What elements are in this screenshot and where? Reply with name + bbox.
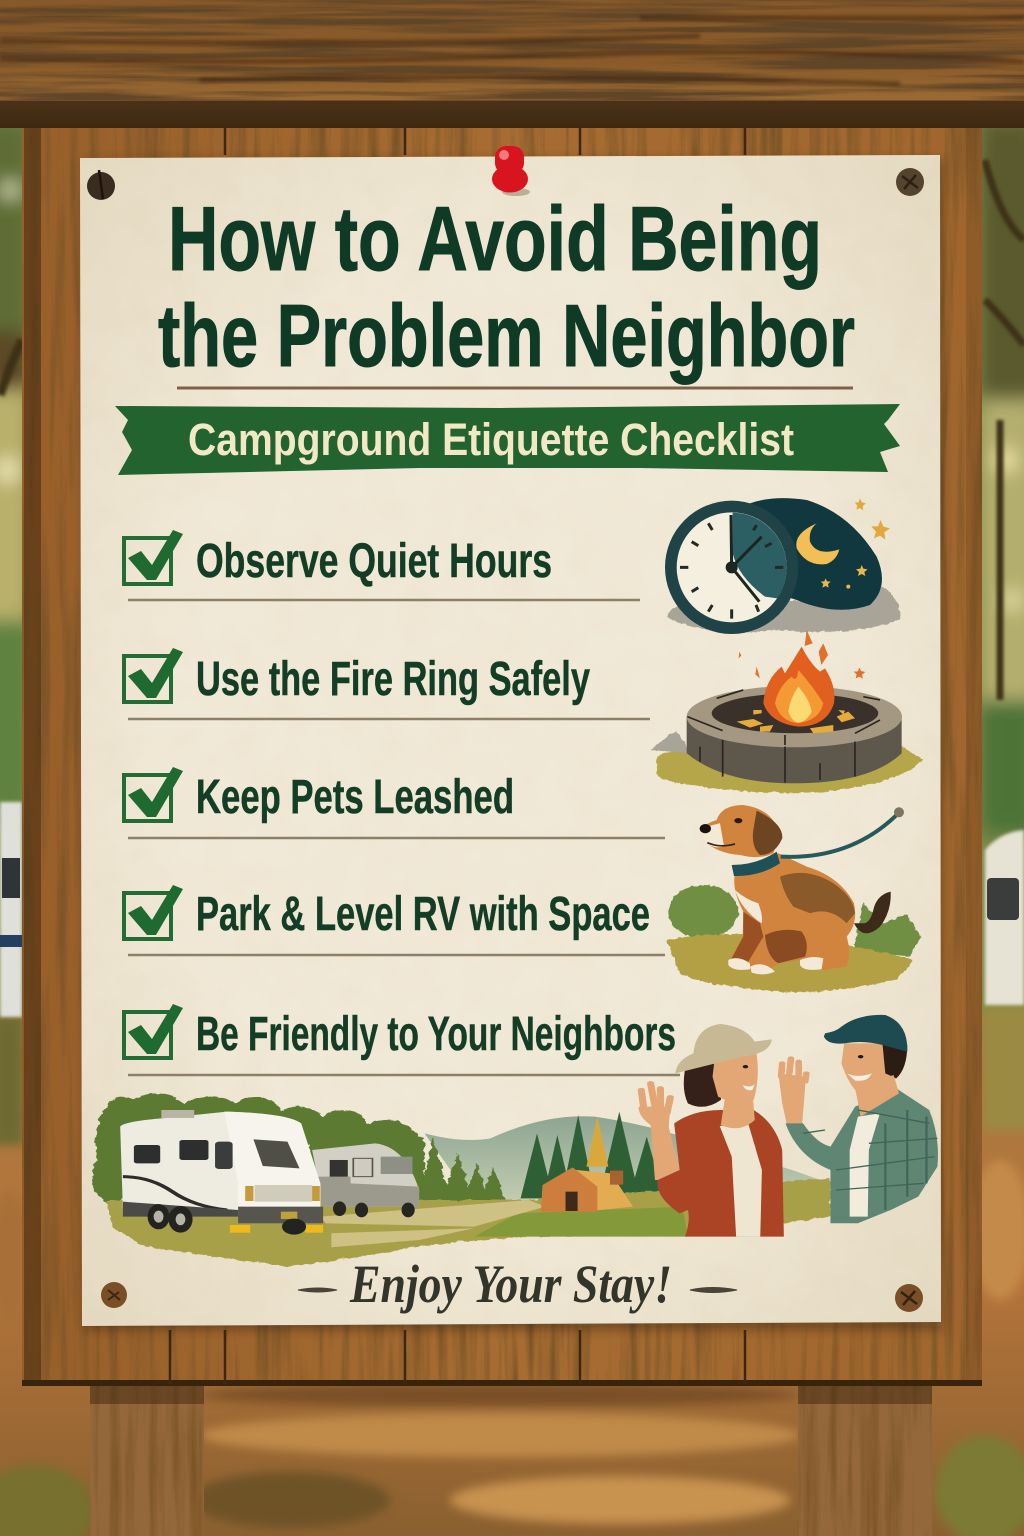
hills xyxy=(425,1116,825,1203)
wooden board xyxy=(22,126,982,1386)
title: How to Avoid Being xyxy=(168,189,822,290)
item: keep pets leashed: Keep Pets Leashed xyxy=(196,771,514,824)
item: park and level rv xyxy=(124,885,665,955)
small rv xyxy=(312,1143,419,1217)
large rv xyxy=(120,1110,323,1235)
illustration: friendly neighbors waving xyxy=(639,1015,938,1237)
illustration: campground scene xyxy=(93,1093,830,1267)
subtitle banner: Campground Etiquette Checklist xyxy=(188,414,794,465)
paper poster xyxy=(80,155,942,1330)
item: use the fire ring safely xyxy=(124,648,650,719)
item: park and level rv: Park & Level RV with Space xyxy=(196,888,650,941)
icon: clock and moon xyxy=(665,498,900,634)
red push pin xyxy=(492,146,530,196)
subtitle banner xyxy=(115,404,900,475)
item: keep pets leashed xyxy=(124,767,665,838)
item: observe quiet hours xyxy=(124,530,640,600)
man xyxy=(778,1015,938,1223)
meadow and road xyxy=(106,1178,830,1267)
item: use the fire ring safely: Use the Fire Ring Safely xyxy=(196,653,590,706)
title xyxy=(158,189,855,385)
footer text: enjoy your stay: Enjoy Your Stay! xyxy=(349,1254,672,1314)
checklist xyxy=(124,530,680,1075)
item: be friendly: Be Friendly to Your Neighbors xyxy=(196,1008,676,1061)
corner nails xyxy=(87,168,924,1312)
left tree line xyxy=(93,1093,505,1203)
title underline xyxy=(177,386,853,390)
icon: dog on leash xyxy=(667,805,920,992)
right conifers xyxy=(521,1112,663,1200)
icon: fire ring xyxy=(650,630,923,793)
item: be friendly xyxy=(124,1004,680,1075)
item: observe quiet hours: Observe Quiet Hours xyxy=(196,535,552,588)
top beam xyxy=(0,0,1024,128)
woman xyxy=(639,1024,784,1237)
posts xyxy=(90,1386,932,1536)
tent xyxy=(541,1167,633,1212)
